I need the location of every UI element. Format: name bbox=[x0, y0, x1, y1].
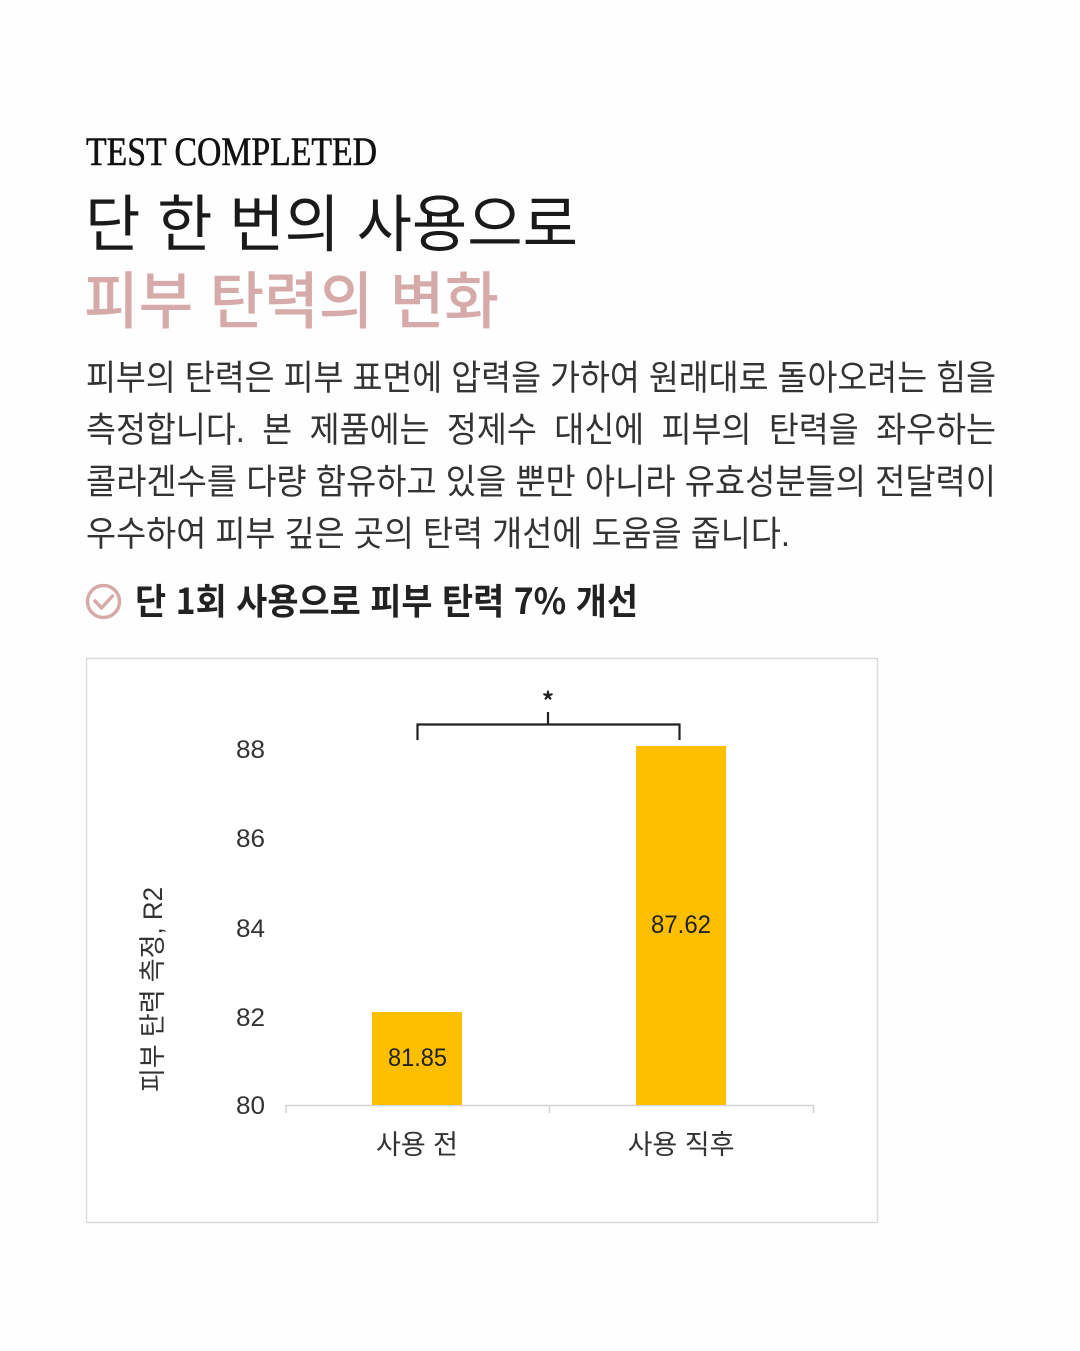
eyebrow: test completed: TEST COMPLETED bbox=[86, 129, 377, 174]
heading line 2: 피부 탄력의 변화 bbox=[84, 268, 499, 337]
body paragraph bbox=[86, 359, 996, 554]
y axis title: 피부 탄력 측정, R2 bbox=[138, 887, 168, 1092]
bar: right after use bbox=[636, 746, 726, 1105]
significance asterisk: * bbox=[542, 682, 554, 717]
body paragraph: 측정합니다. 본 제품에는 정제수 대신에 피부의 탄력을 좌우하는 bbox=[86, 411, 996, 450]
y axis labels bbox=[236, 736, 265, 1120]
icon: check circle bbox=[88, 586, 120, 618]
x label: before use: 사용 전 bbox=[376, 1130, 458, 1160]
callout text: 단 1회 사용으로 피부 탄력 7% 개선 bbox=[135, 573, 638, 625]
y axis labels: 86 bbox=[236, 825, 265, 853]
body paragraph: 피부의 탄력은 피부 표면에 압력을 가하여 원래대로 돌아오려는 힘을 bbox=[86, 359, 996, 398]
y axis labels: 88 bbox=[236, 736, 265, 764]
value: before use: 81.85 bbox=[388, 1044, 447, 1072]
significance bracket bbox=[418, 712, 680, 740]
heading line 1: 단 한 번의 사용으로 bbox=[85, 191, 578, 260]
bar: before use bbox=[372, 1012, 462, 1105]
chart frame bbox=[86, 658, 878, 1222]
body paragraph: 우수하여 피부 깊은 곳의 탄력 개선에 도움을 줍니다. bbox=[86, 515, 790, 554]
y axis labels: 82 bbox=[236, 1004, 265, 1032]
value: right after use: 87.62 bbox=[651, 911, 711, 939]
y axis labels: 84 bbox=[236, 915, 265, 943]
panel: bar chart bbox=[86, 658, 878, 1222]
x label: right after use: 사용 직후 bbox=[628, 1130, 734, 1160]
y axis labels: 80 bbox=[236, 1092, 265, 1120]
callout: key result bbox=[88, 573, 638, 625]
x axis bbox=[286, 1106, 814, 1113]
body paragraph: 콜라겐수를 다량 함유하고 있을 뿐만 아니라 유효성분들의 전달력이 bbox=[86, 463, 996, 502]
